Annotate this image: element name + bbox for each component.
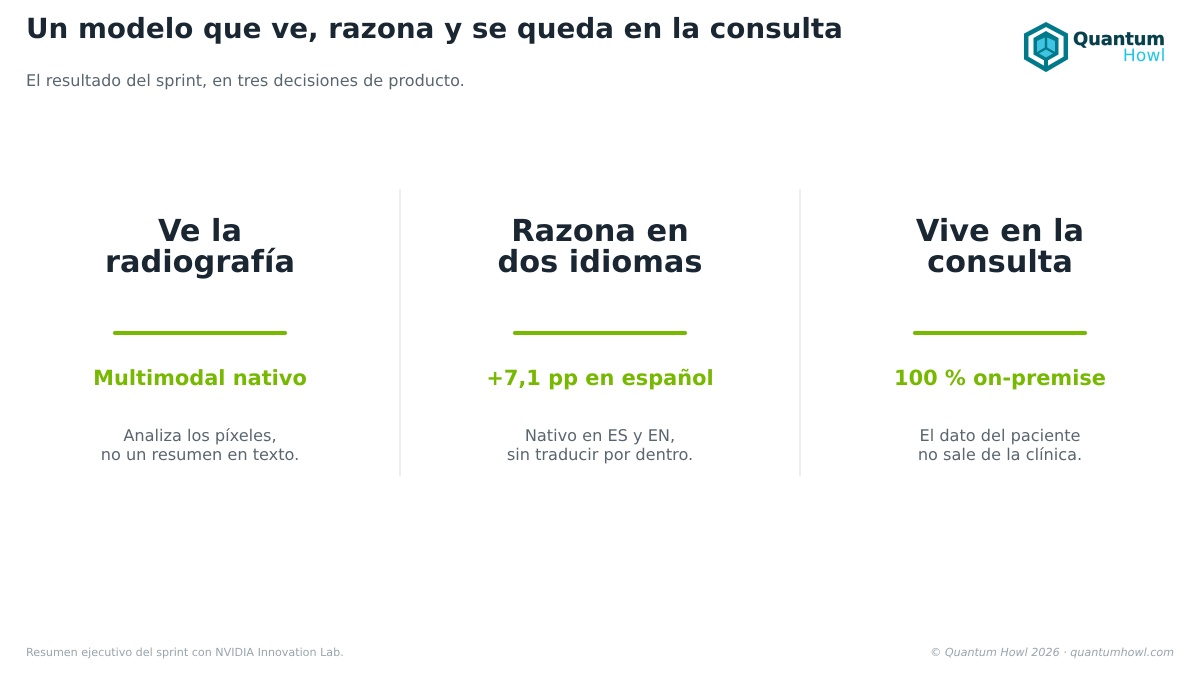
footer: source note: Resumen ejecutivo del sprint con NVIDIA Innovation Lab. bbox=[26, 646, 344, 659]
description bbox=[507, 426, 693, 464]
heading: Vive en la bbox=[916, 214, 1084, 248]
logo sub-wordmark: Howl bbox=[1123, 46, 1166, 66]
heading: Ve la bbox=[158, 214, 242, 248]
heading bbox=[105, 214, 295, 280]
description: no sale de la clínica. bbox=[918, 444, 1082, 464]
description: no un resumen en texto. bbox=[101, 444, 299, 464]
icon: hexagon cube bbox=[1024, 22, 1068, 72]
description: Analiza los píxeles, bbox=[123, 426, 277, 444]
divider bbox=[399, 189, 401, 476]
description: El dato del paciente bbox=[920, 426, 1080, 444]
panel: Ve la radiografía bbox=[93, 214, 307, 464]
description: Nativo en ES y EN, bbox=[525, 426, 675, 444]
panel: Vive en la consulta bbox=[894, 214, 1106, 464]
key message: Multimodal nativo bbox=[93, 366, 307, 390]
accent rule bbox=[113, 331, 287, 335]
description: sin traducir por dentro. bbox=[507, 444, 693, 464]
description bbox=[101, 426, 299, 464]
footer: copyright: © Quantum Howl 2026 · quantumhowl.com bbox=[930, 646, 1174, 659]
heading: radiografía bbox=[105, 244, 295, 280]
heading: consulta bbox=[927, 244, 1073, 280]
logo: Quantum Howl bbox=[1024, 22, 1166, 72]
title: Un modelo que ve, razona y se queda en la consulta bbox=[26, 12, 843, 45]
heading: Razona en bbox=[511, 214, 689, 248]
panel: Razona en dos idiomas bbox=[486, 214, 714, 464]
divider bbox=[799, 189, 801, 476]
logo wordmark: Quantum bbox=[1073, 28, 1165, 50]
description bbox=[918, 426, 1082, 464]
key message: 100 % on-premise bbox=[894, 366, 1106, 390]
heading bbox=[916, 214, 1084, 280]
subtitle: El resultado del sprint, en tres decisiones de producto. bbox=[26, 71, 465, 90]
heading bbox=[497, 214, 703, 280]
accent rule bbox=[513, 331, 687, 335]
heading: dos idiomas bbox=[497, 244, 703, 280]
accent rule bbox=[913, 331, 1087, 335]
key message: +7,1 pp en español bbox=[486, 366, 714, 390]
